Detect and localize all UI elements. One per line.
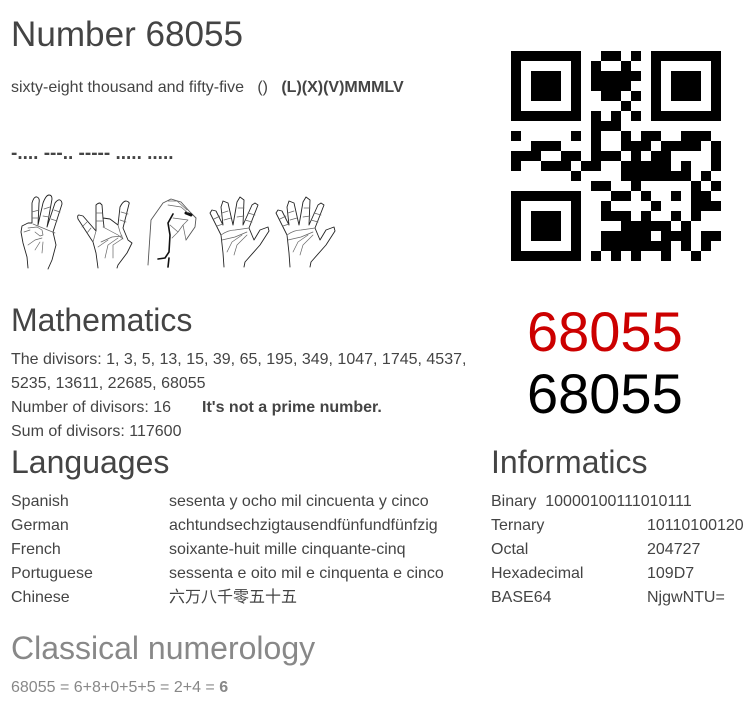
languages table: Spanish bbox=[11, 493, 69, 510]
numerology calculation: 68055 = 6+8+0+5+5 = 2+4 = 6 bbox=[11, 679, 228, 696]
list of divisors bbox=[11, 351, 466, 392]
informatics table: Binary 10000100111010111 bbox=[491, 493, 692, 510]
heading: languages: Languages bbox=[11, 444, 169, 480]
informatics table: Octal bbox=[491, 541, 528, 558]
heading: classical numerology: Classical numerology bbox=[11, 630, 315, 666]
informatics table: NjgwNTU= bbox=[647, 589, 725, 606]
languages table bbox=[11, 493, 444, 606]
languages table: sessenta e oito mil e cinquenta e cinco bbox=[169, 565, 444, 582]
languages table: sesenta y ocho mil cincuenta y cinco bbox=[169, 493, 429, 510]
heading: informatics: Informatics bbox=[491, 444, 647, 480]
QR code bbox=[511, 51, 721, 261]
number in red: 68055 bbox=[527, 300, 683, 363]
icon: hand five repeat bbox=[276, 197, 335, 267]
list of divisors: The divisors: 1, 3, 5, 13, 15, 39, 65, 195, 349, 1047, 1745, 4537, bbox=[11, 351, 466, 368]
number in words and roman numerals: sixty-eight thousand and fifty-five () (L)(X)(V)MMMLV bbox=[11, 79, 404, 96]
informatics table: 109D7 bbox=[647, 565, 694, 582]
text: It's not a prime number. bbox=[202, 399, 382, 416]
icon: hand eight bbox=[78, 201, 132, 268]
icon: hand zero bbox=[148, 199, 196, 267]
icon: sign language hands bbox=[20, 194, 336, 270]
informatics table: 10110100120 bbox=[647, 517, 744, 534]
informatics table: 204727 bbox=[647, 541, 700, 558]
number of divisors and prime status: Number of divisors: 16 bbox=[11, 399, 171, 416]
list of divisors: 5235, 13611, 22685, 68055 bbox=[11, 375, 206, 392]
icon: hand three bbox=[21, 195, 62, 269]
languages table: French bbox=[11, 541, 61, 558]
informatics table: Ternary bbox=[491, 517, 544, 534]
languages table: German bbox=[11, 517, 69, 534]
languages table: 六万八千零五十五 bbox=[169, 589, 297, 606]
languages table: soixante-huit mille cinquante-cinq bbox=[169, 541, 406, 558]
number in black: 68055 bbox=[527, 362, 683, 425]
languages table: Chinese bbox=[11, 589, 70, 606]
icon: hand five bbox=[210, 197, 269, 267]
informatics table: BASE64 bbox=[491, 589, 551, 606]
languages table: achtundsechzigtausendfünfundfünfzig bbox=[169, 517, 438, 534]
morse code: -.... ---.. ----- ..... ..... bbox=[11, 143, 174, 164]
languages table: Portuguese bbox=[11, 565, 93, 582]
number of divisors and prime status bbox=[11, 399, 382, 416]
sum of divisors: Sum of divisors: 117600 bbox=[11, 423, 181, 440]
title: Number 68055 bbox=[11, 15, 243, 54]
informatics table: Hexadecimal bbox=[491, 565, 583, 582]
heading: mathematics: Mathematics bbox=[11, 302, 192, 338]
informatics table bbox=[491, 493, 744, 606]
